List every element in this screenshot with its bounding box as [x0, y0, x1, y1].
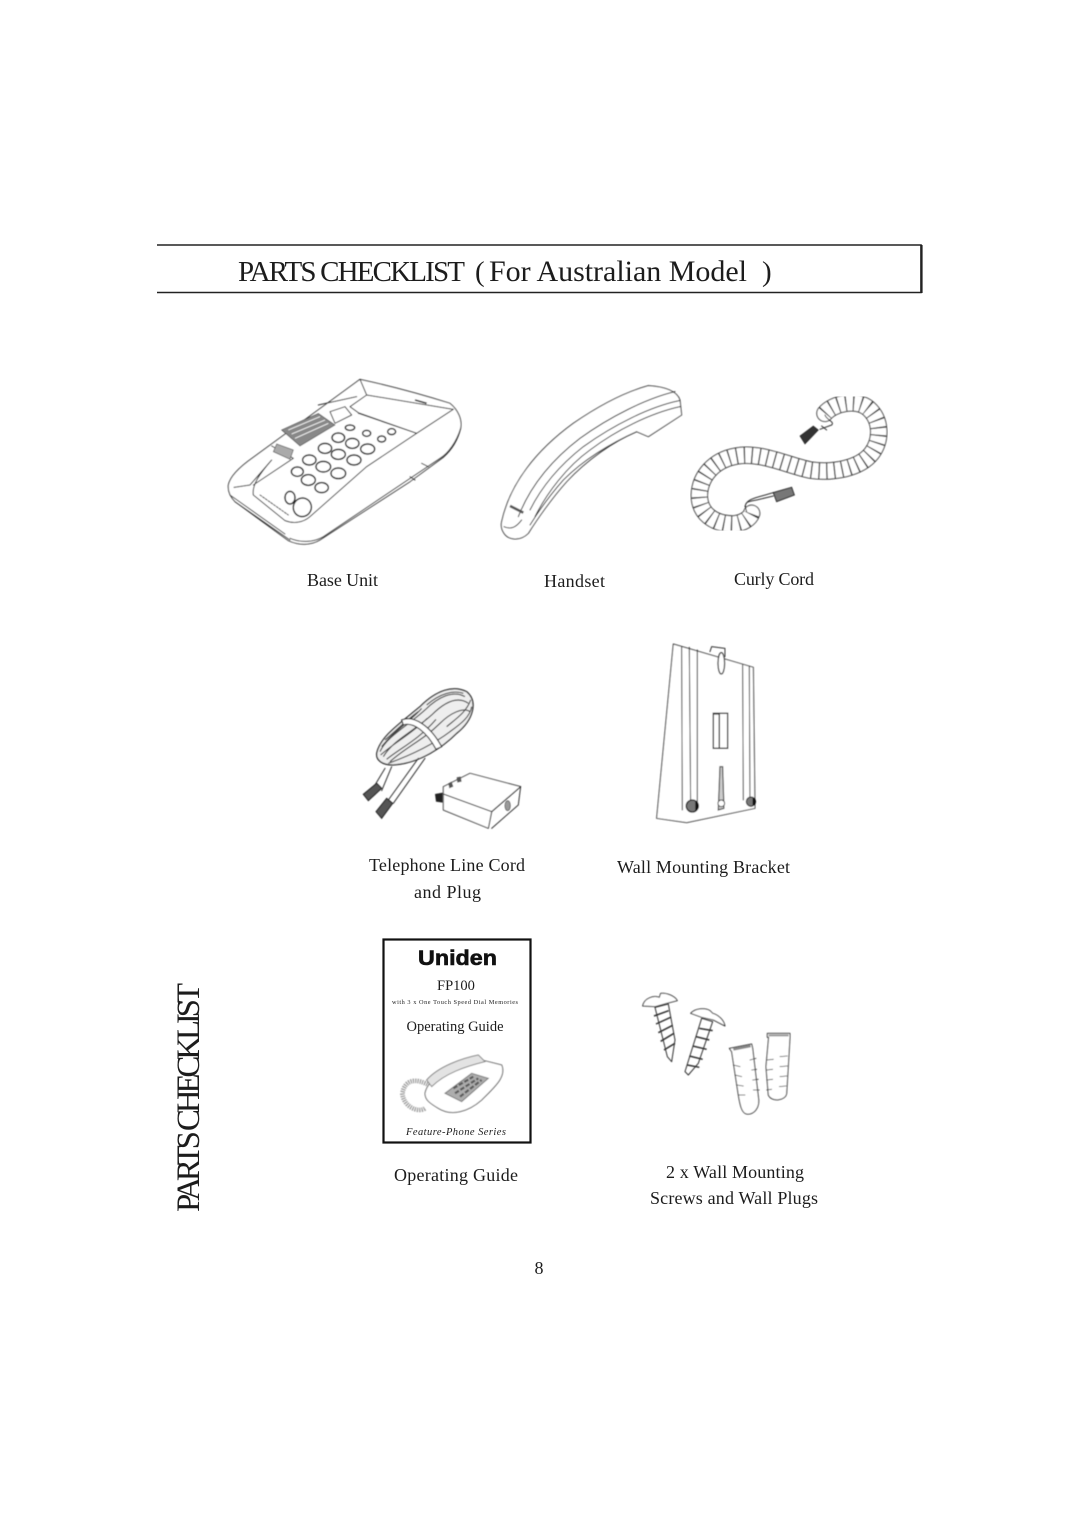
page number: 8	[534, 1258, 544, 1278]
illustration: operating guide cover: Feature-Phone Series	[405, 1127, 506, 1138]
illustration: curly cord	[699, 403, 879, 524]
vertical side heading: PARTS CHECKLIST	[171, 983, 207, 1212]
illustration: operating guide cover: FP100	[437, 978, 475, 994]
label: wall mounting screws and wall plugs: Screws and Wall Plugs	[650, 1188, 818, 1208]
title banner: PARTS CHECKLIST	[238, 256, 465, 288]
illustration: operating guide cover: Operating Guide	[406, 1019, 504, 1035]
title banner: For Australian Model	[489, 255, 747, 288]
label: operating guide: Operating Guide	[394, 1165, 518, 1185]
illustration: screws and wall plugs	[643, 993, 790, 1114]
title banner	[157, 245, 922, 293]
label: handset: Handset	[544, 571, 605, 591]
illustration: wall mounting bracket	[657, 644, 756, 823]
plug 2	[766, 1033, 790, 1100]
illustration: operating guide cover	[384, 940, 530, 1142]
title banner: )	[762, 256, 772, 288]
label: telephone line cord and plug: Telephone Line Cord	[369, 855, 525, 875]
illustration: telephone line cord and plug	[363, 689, 521, 828]
cover phone picture	[402, 1055, 503, 1112]
label: base unit: Base Unit	[307, 570, 378, 590]
screw 1	[643, 993, 677, 1062]
label: telephone line cord and plug	[369, 855, 525, 902]
illustration: handset	[501, 386, 682, 539]
label: wall mounting screws and wall plugs	[650, 1162, 818, 1208]
label: wall mounting screws and wall plugs: 2 x Wall Mounting	[666, 1162, 804, 1182]
title banner: (	[475, 256, 485, 288]
keypad buttons	[285, 425, 396, 519]
brand logo: Uniden	[418, 947, 497, 970]
plug 1	[729, 1044, 759, 1114]
label: curly cord: Curly Cord	[734, 569, 814, 589]
screw 2	[685, 1009, 725, 1075]
label: wall mounting bracket: Wall Mounting Bracket	[617, 857, 790, 877]
illustration: operating guide cover: with 3 x One Touch Speed Dial Memories	[392, 999, 519, 1006]
illustration: base unit	[228, 379, 461, 544]
label: telephone line cord and plug: and Plug	[414, 882, 481, 902]
